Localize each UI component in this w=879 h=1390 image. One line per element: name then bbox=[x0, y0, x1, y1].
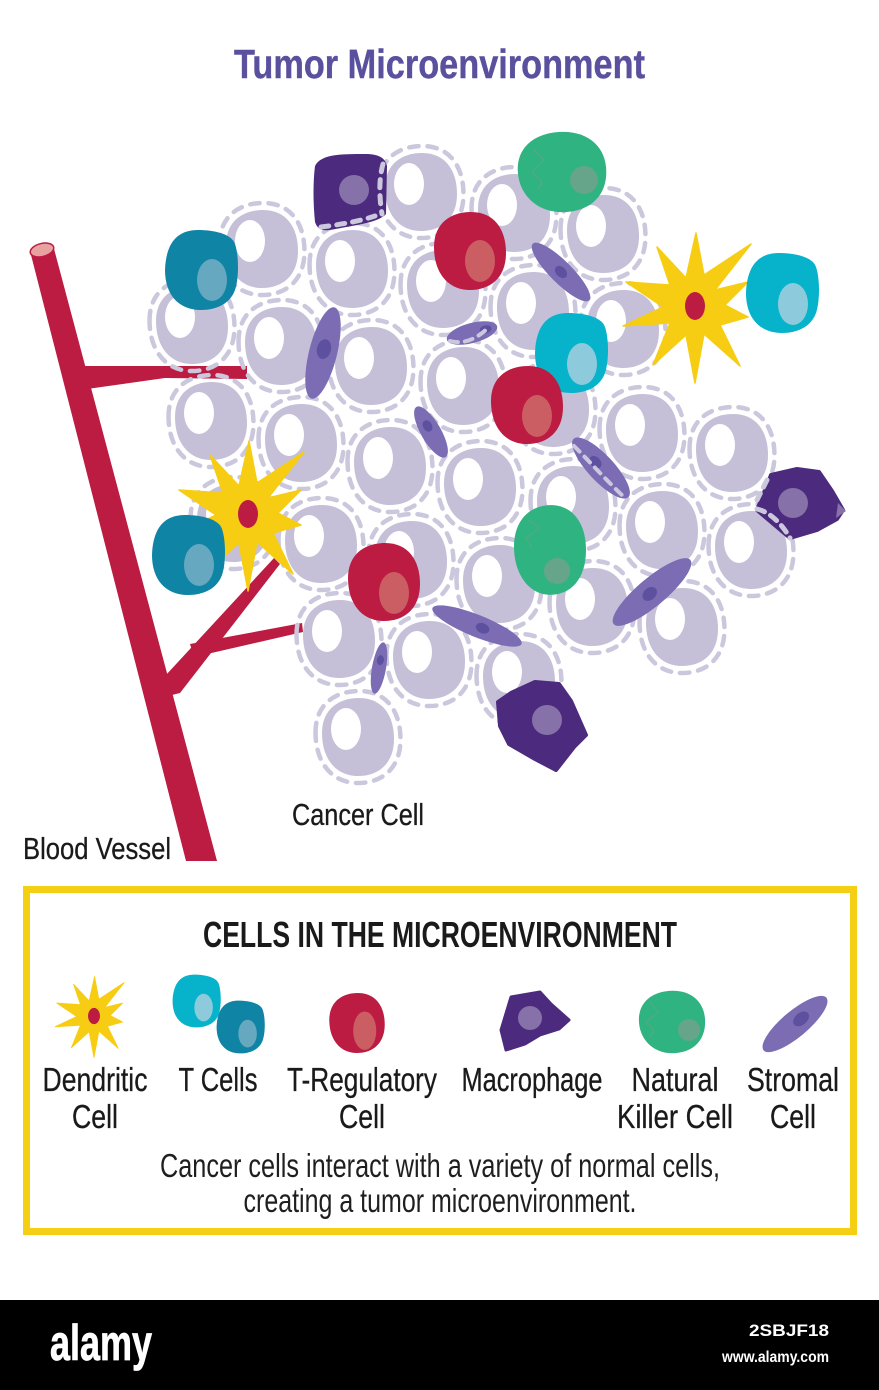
natural killer cell lower bbox=[514, 505, 586, 595]
footer image id: 2SBJF18 bbox=[749, 1321, 829, 1340]
T-regulatory cell lower bbox=[348, 543, 420, 621]
stromal cells bbox=[298, 236, 699, 695]
label: blood vessel: Blood Vessel bbox=[23, 831, 171, 866]
T cell cyan right bbox=[746, 253, 819, 333]
dendritic cell upper right bbox=[623, 233, 751, 383]
legend icon: T cells bbox=[173, 975, 265, 1053]
footer logo: alamy bbox=[50, 1315, 152, 1371]
legend label: dendritic cell: Cell bbox=[72, 1098, 118, 1135]
macrophage top bbox=[314, 154, 387, 230]
blood vessel bbox=[29, 241, 303, 861]
T cell teal lower left bbox=[152, 515, 225, 595]
legend label: dendritic cell: Dendritic bbox=[42, 1061, 148, 1098]
macrophage right bbox=[757, 469, 846, 538]
legend label: stromal cell bbox=[747, 1061, 839, 1135]
stock photo footer bar bbox=[0, 1300, 879, 1390]
legend icon: natural killer cell bbox=[639, 991, 705, 1053]
legend label: natural killer cell: Killer Cell bbox=[617, 1098, 733, 1135]
label: cancer cell: Cancer Cell bbox=[292, 797, 424, 832]
legend label: dendritic cell bbox=[42, 1061, 148, 1135]
legend description: Cancer cells interact with a variety of normal cells, bbox=[160, 1147, 720, 1184]
legend heading: CELLS IN THE MICROENVIRONMENT bbox=[203, 914, 677, 955]
legend icon: stromal cell bbox=[755, 988, 835, 1060]
legend icon: T-regulatory cell bbox=[329, 993, 385, 1053]
legend panel bbox=[26, 890, 854, 1232]
legend icon: macrophage bbox=[501, 992, 569, 1050]
legend description: creating a tumor microenvironment. bbox=[244, 1182, 636, 1219]
legend icon: macrophage nucleus bbox=[518, 1006, 542, 1030]
legend description bbox=[160, 1147, 720, 1219]
T-regulatory cell centre bbox=[491, 366, 563, 444]
legend label: macrophage: Macrophage bbox=[462, 1061, 602, 1098]
legend label: T-regulatory cell: Cell bbox=[339, 1098, 385, 1135]
legend icon: dendritic cell bbox=[55, 977, 124, 1058]
legend label: T-regulatory cell: T-Regulatory bbox=[287, 1061, 437, 1098]
T-regulatory cell top bbox=[434, 212, 506, 290]
legend label: natural killer cell: Natural bbox=[632, 1061, 718, 1098]
legend label: T-regulatory cell bbox=[287, 1061, 437, 1135]
legend label: stromal cell: Cell bbox=[770, 1098, 816, 1135]
footer url: www.alamy.com bbox=[721, 1349, 829, 1366]
legend label: natural killer cell bbox=[617, 1061, 733, 1135]
T cell cyan centre bbox=[535, 313, 608, 393]
macrophage bottom bbox=[498, 682, 586, 770]
T cell teal top left bbox=[165, 230, 238, 310]
dendritic cell left bbox=[176, 441, 304, 591]
cancer cells cluster bbox=[150, 146, 793, 783]
legend label: T cells: T Cells bbox=[178, 1061, 258, 1098]
natural killer cell top bbox=[518, 132, 606, 212]
legend label: stromal cell: Stromal bbox=[747, 1061, 839, 1098]
title: Tumor Microenvironment bbox=[234, 41, 645, 87]
